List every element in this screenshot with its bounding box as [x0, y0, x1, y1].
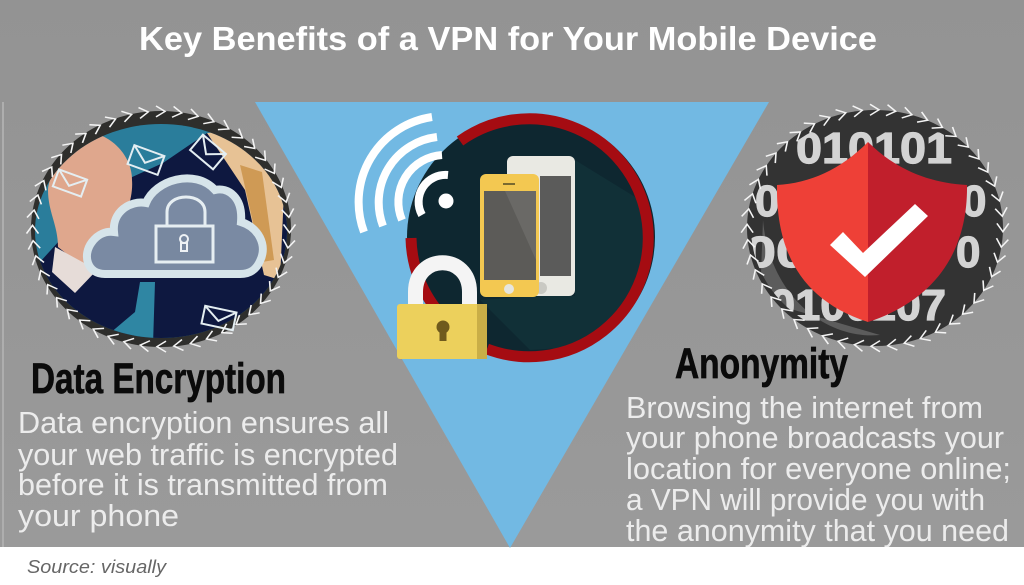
- binary digits: 00: [745, 228, 807, 277]
- chevron ring: [0, 81, 332, 377]
- text: anonymity description: location for everyone online;: [626, 452, 1011, 486]
- heading: anonymity: Anonymity: [675, 340, 848, 388]
- left edge rule: [2, 102, 4, 547]
- icon: data encryption circular photo: [26, 106, 296, 352]
- title: Key Benefits of a VPN for Your Mobile Device: [139, 20, 877, 57]
- text: anonymity description: [626, 391, 1011, 548]
- binary digits: 0: [755, 177, 779, 226]
- chevron ring: [705, 79, 1024, 377]
- binary digits: [745, 124, 986, 335]
- yellow phone: [480, 174, 539, 297]
- icon: anonymity shield over binary: [740, 104, 1010, 352]
- text: anonymity description: your phone broadcasts your: [626, 421, 1004, 455]
- wifi signal: [359, 117, 454, 232]
- text: anonymity description: Browsing the internet from: [626, 391, 983, 425]
- source note: Source: visually: [27, 557, 167, 577]
- heading: data encryption: Data Encryption: [31, 355, 286, 403]
- red ring arcs: [411, 119, 648, 357]
- white phone: [507, 156, 575, 296]
- photo scene: hand, suit and cloud lock: [30, 120, 292, 345]
- binary digits: 010101: [796, 124, 952, 173]
- blue inverted triangle panel: [255, 102, 769, 548]
- text: data encryption description: before it is transmitted from: [18, 468, 388, 502]
- text: anonymity description: a VPN will provide you with: [626, 483, 985, 517]
- binary digits: 0: [962, 177, 986, 226]
- binary digits: 0100107: [770, 281, 946, 330]
- text: data encryption description: your web traffic is encrypted: [18, 438, 398, 472]
- binary digits: 0: [956, 228, 980, 277]
- text: anonymity description: the anonymity that you need: [626, 514, 1009, 548]
- dark disc: [407, 115, 655, 359]
- text: data encryption description: your phone: [18, 499, 179, 533]
- text: data encryption description: Data encryption ensures all: [18, 406, 389, 440]
- envelopes: [53, 135, 237, 330]
- padlock: [397, 263, 487, 359]
- long shadow: [480, 160, 655, 350]
- shield: [777, 142, 967, 322]
- cloud with padlock: [87, 178, 263, 274]
- icon: phones, wifi and padlock: [359, 115, 655, 359]
- text: data encryption description: [18, 406, 398, 533]
